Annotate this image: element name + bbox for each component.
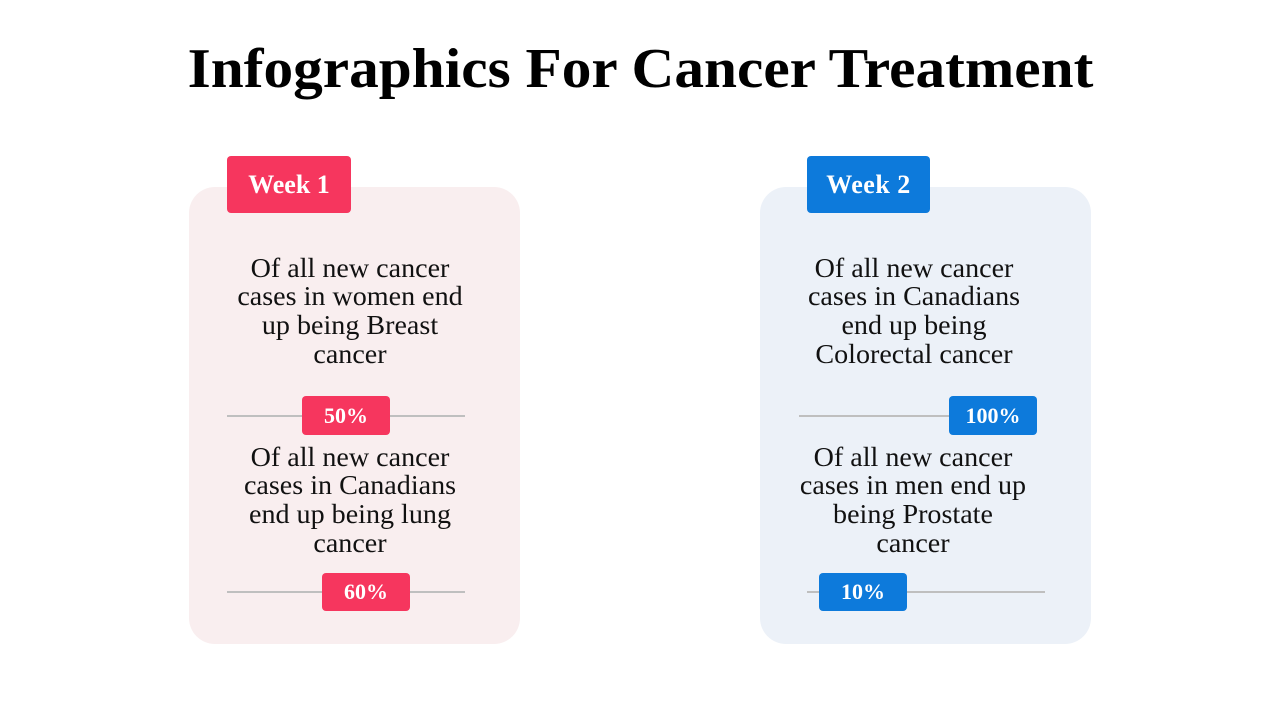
text: prostate cancer [800, 442, 1026, 558]
text: lung cancer: cancer [313, 528, 387, 558]
text: prostate cancer: Of all new cancer [814, 442, 1012, 472]
text: prostate cancer: cancer [876, 528, 950, 558]
text: colorectal cancer: Colorectal cancer [815, 339, 1013, 369]
badge: week 2 [807, 156, 930, 213]
value: 50%: 50% [324, 403, 368, 428]
text: breast cancer: Of all new cancer [251, 253, 449, 283]
badge: week 1 [227, 156, 351, 213]
text: lung cancer: cases in Canadians [244, 470, 456, 500]
title: Infographics For Cancer Treatment [188, 38, 1093, 100]
value: 10% [819, 573, 907, 611]
text: breast cancer: up being Breast [262, 310, 438, 340]
panel: week 1 [189, 187, 520, 644]
badge: week 1: Week 1 [248, 170, 330, 199]
text: prostate cancer: cases in men end up [800, 470, 1026, 500]
text: colorectal cancer: cases in Canadians [808, 281, 1020, 311]
value: 50% [302, 396, 390, 435]
text: breast cancer [237, 253, 463, 369]
value: 10%: 10% [841, 579, 885, 604]
text: prostate cancer: being Prostate [833, 499, 993, 529]
value: 100% [949, 396, 1037, 435]
value: 100%: 100% [966, 403, 1020, 428]
text: colorectal cancer: end up being [841, 310, 987, 340]
text: lung cancer: Of all new cancer [251, 442, 449, 472]
value: 60%: 60% [344, 579, 388, 604]
text: lung cancer [244, 442, 456, 558]
text: breast cancer: cases in women end [237, 281, 463, 311]
panel: week 2 [760, 187, 1091, 644]
text: colorectal cancer [808, 253, 1020, 369]
text: breast cancer: cancer [313, 339, 387, 369]
badge: week 2: Week 2 [826, 170, 911, 199]
text: lung cancer: end up being lung [249, 499, 451, 529]
value: 60% [322, 573, 410, 611]
text: colorectal cancer: Of all new cancer [815, 253, 1013, 283]
